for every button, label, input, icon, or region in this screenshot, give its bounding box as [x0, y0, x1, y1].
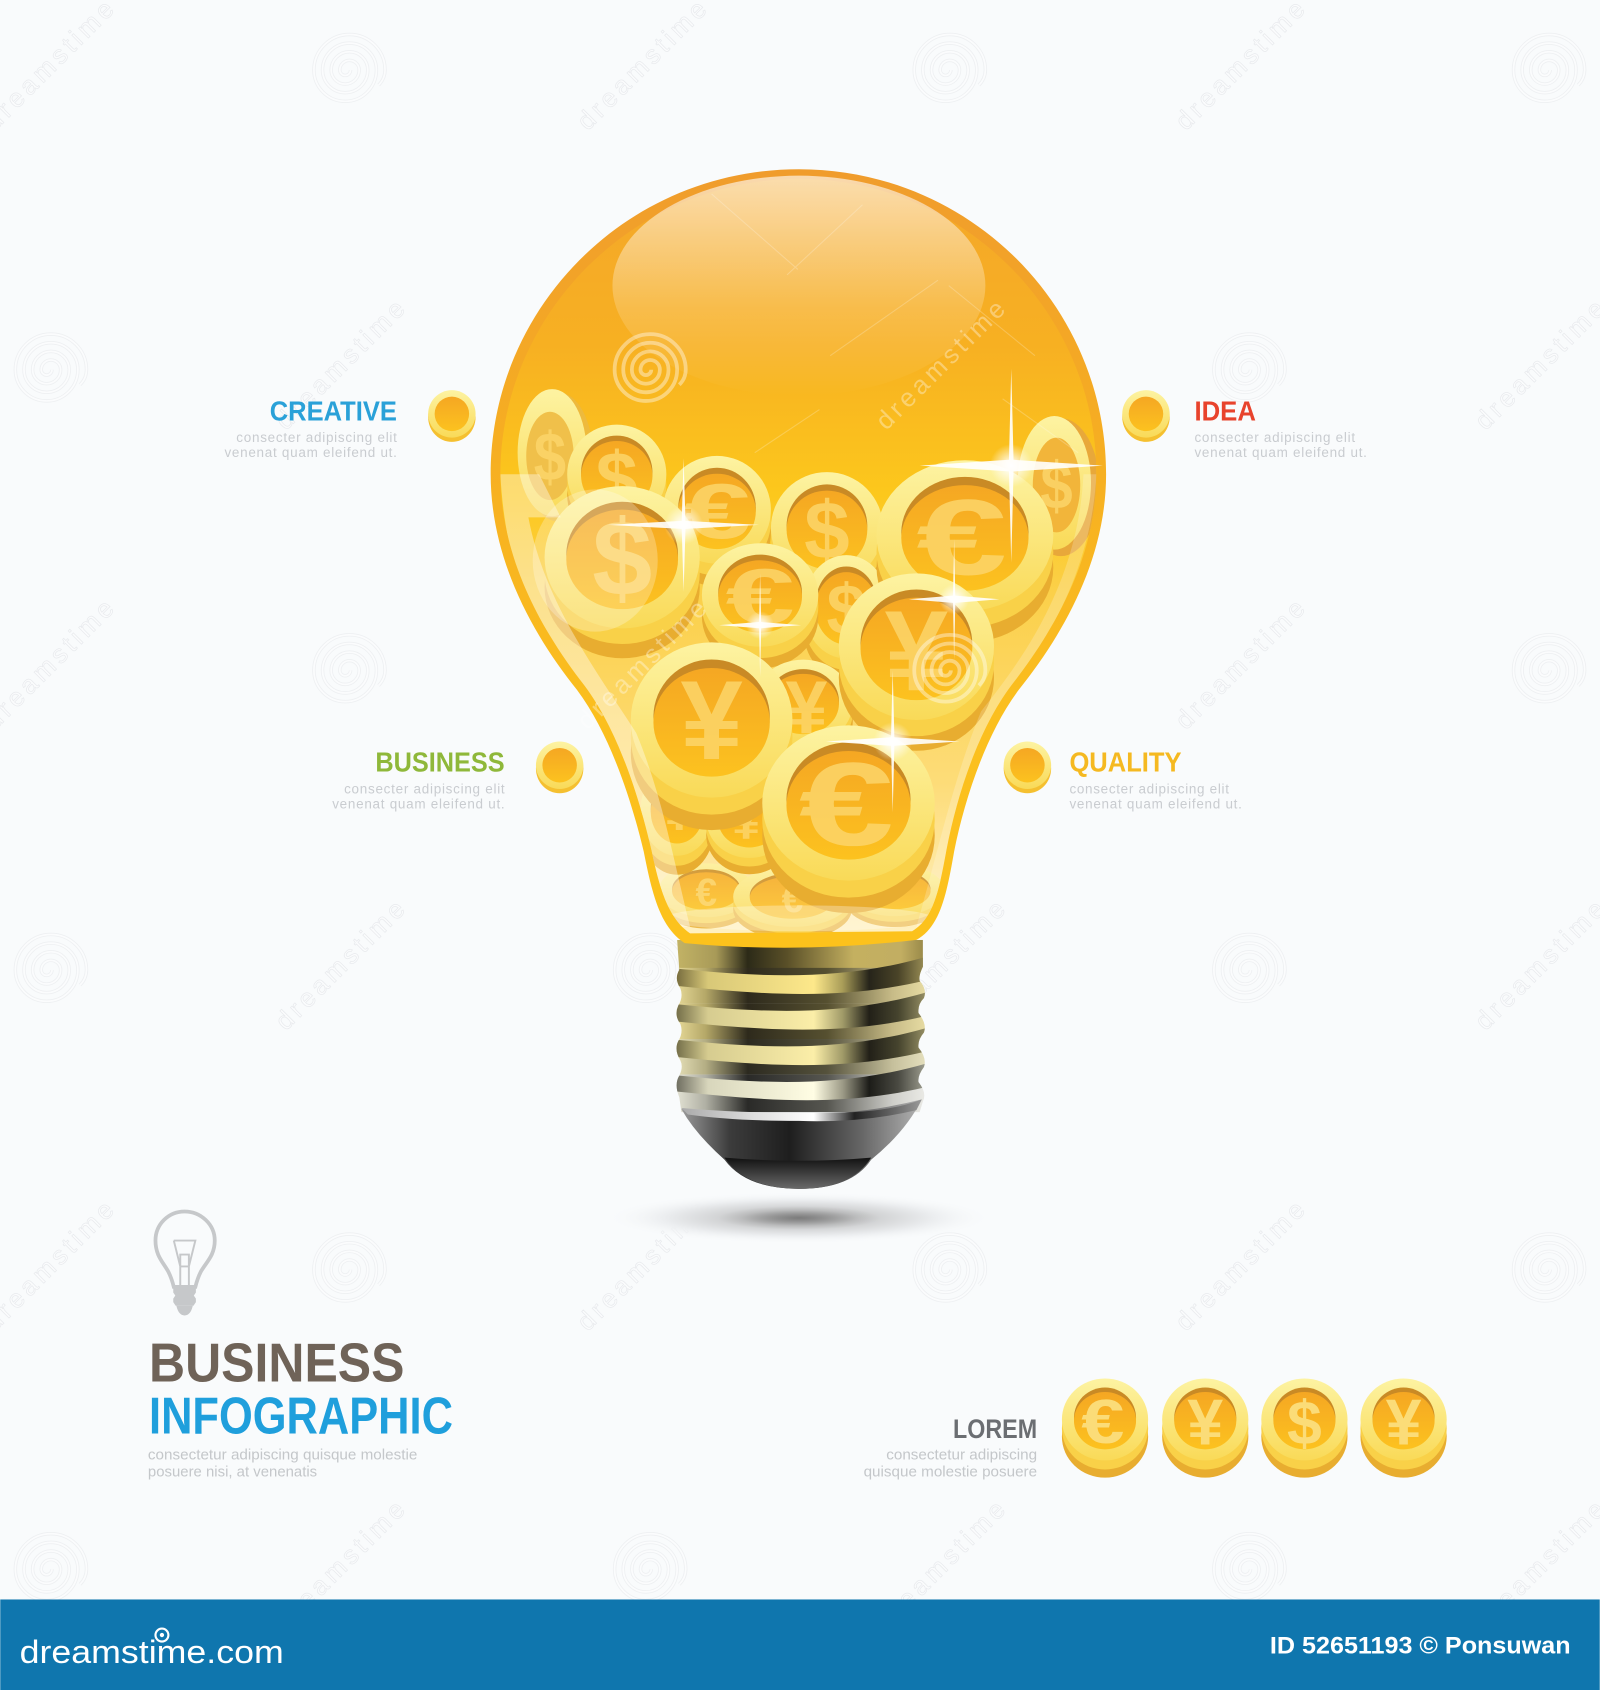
coins: bottom row — [660, 864, 940, 933]
coin: yen: ¥ — [1187, 1385, 1223, 1458]
callout: business: venenat quam eleifend ut. — [332, 796, 505, 811]
title: INFOGRAPHIC — [149, 1386, 453, 1444]
legend text: consectetur adipiscing — [886, 1446, 1037, 1463]
coin: euro: € — [1081, 1387, 1124, 1457]
sparkles — [608, 369, 1103, 813]
watermark layer: dreamstime — [1170, 595, 1311, 735]
light bulb glass with coins — [491, 169, 1106, 948]
coin: large yen right: ¥ — [885, 588, 949, 715]
coin: front euro: € — [799, 739, 894, 871]
coins: low back row: ¥ — [665, 783, 694, 841]
coin: yen — [1360, 1379, 1447, 1478]
footer bar — [0, 1599, 1600, 1690]
coin: large dollar — [533, 486, 700, 658]
watermark layer: dreamstime — [871, 1496, 1011, 1636]
coin: large euro — [877, 460, 1053, 643]
coin: large yen left: ¥ — [680, 658, 743, 783]
callout: quality: venenat quam eleifend ut. — [1069, 796, 1242, 811]
callout: business: BUSINESS — [375, 747, 505, 778]
coins: low back row: ¥ — [732, 794, 760, 850]
footer logo: dreamstime.com — [20, 1634, 284, 1670]
coin: large euro: € — [916, 476, 1007, 597]
footer credit: ID 52651193 © Ponsuwan — [1270, 1633, 1571, 1659]
legend text — [864, 1414, 1037, 1481]
icon: small outline bulb — [155, 1211, 215, 1315]
coin: right tilted dollar: $ — [1040, 450, 1073, 524]
watermark layer: dreamstime — [871, 895, 1011, 1036]
coin: back yen — [772, 660, 853, 744]
callout: creative: CREATIVE — [270, 395, 397, 426]
coin: top dollar — [770, 472, 881, 574]
coin: upper-left dollar: $ — [596, 436, 638, 520]
title — [149, 1332, 453, 1444]
icon: coin quality — [1004, 742, 1051, 793]
coin: front euro — [762, 725, 935, 913]
glass reflections — [500, 474, 1096, 931]
coin: yen: ¥ — [1386, 1385, 1422, 1458]
top gloss highlight — [612, 176, 985, 396]
callout: quality: QUALITY — [1069, 747, 1182, 778]
watermark layer: dreamstime — [270, 895, 411, 1036]
icon: coin business — [536, 742, 583, 793]
coin: large yen left — [631, 642, 792, 830]
watermark layer: dreamstime — [572, 1196, 712, 1336]
metal cap — [681, 1099, 922, 1189]
coin: top dollar: $ — [804, 485, 850, 576]
callout: quality: consecter adipiscing elit — [1069, 781, 1229, 796]
coin: left tilted dollar — [518, 389, 593, 522]
coins: bottom row: € — [695, 871, 717, 914]
bulb ground shadow — [605, 1192, 993, 1244]
callout: creative: venenat quam eleifend ut. — [224, 445, 397, 460]
coin: upper-left dollar — [567, 424, 666, 506]
screw base — [669, 936, 933, 1189]
coin: mid euro: € — [726, 554, 795, 640]
coin: right tilted dollar — [1018, 416, 1100, 556]
watermark layer: dreamstime — [1170, 1196, 1311, 1336]
icon: coin idea — [1122, 390, 1170, 442]
glass inner body — [500, 179, 1096, 933]
watermark layer: dreamstime — [270, 295, 411, 435]
callout: idea: venenat quam eleifend ut. — [1194, 445, 1367, 460]
coin: mid dollar: $ — [827, 571, 866, 650]
callout: business — [332, 747, 505, 811]
coins: bottom row: € — [782, 878, 803, 921]
coin: mid euro — [702, 543, 818, 668]
coin: top euro: € — [684, 469, 750, 555]
coin: dollar — [1261, 1379, 1348, 1478]
callout: quality — [1069, 747, 1242, 811]
watermark over bulb: dreamstime — [871, 295, 1011, 435]
callout: creative: consecter adipiscing elit — [236, 430, 397, 445]
glass outer rim — [491, 169, 1106, 948]
coin: back yen: ¥ — [785, 665, 827, 749]
coin: yen — [1162, 1379, 1248, 1478]
coins pile — [518, 389, 1100, 940]
title description: posuere nisi, at venenatis — [148, 1464, 317, 1481]
coin: euro — [1062, 1379, 1148, 1478]
coin: mid dollar — [806, 555, 878, 673]
watermark layer: dreamstime — [270, 1496, 411, 1636]
legend coins — [1062, 1379, 1447, 1478]
title description: consectetur adipiscing quisque molestie — [148, 1446, 417, 1463]
coin: large yen right — [839, 573, 994, 751]
legend text: quisque molestie posuere — [864, 1464, 1037, 1481]
callout: creative — [224, 395, 397, 460]
coins: low back row — [640, 804, 771, 875]
legend text: LOREM — [953, 1414, 1037, 1444]
coin: top euro — [663, 456, 771, 586]
icon: coin creative — [428, 390, 476, 442]
callout: idea: consecter adipiscing elit — [1194, 430, 1355, 445]
watermark over bulb: dreamstime — [572, 595, 712, 735]
title: BUSINESS — [149, 1332, 404, 1394]
coin: large dollar: $ — [592, 497, 652, 618]
callout: business: consecter adipiscing elit — [344, 781, 505, 796]
title description — [148, 1446, 417, 1481]
callout: idea — [1194, 395, 1367, 460]
watermark over bulb — [572, 194, 1078, 735]
coin: left tilted dollar: $ — [534, 419, 566, 496]
callout: idea: IDEA — [1194, 395, 1256, 426]
coin: dollar: $ — [1287, 1388, 1322, 1458]
